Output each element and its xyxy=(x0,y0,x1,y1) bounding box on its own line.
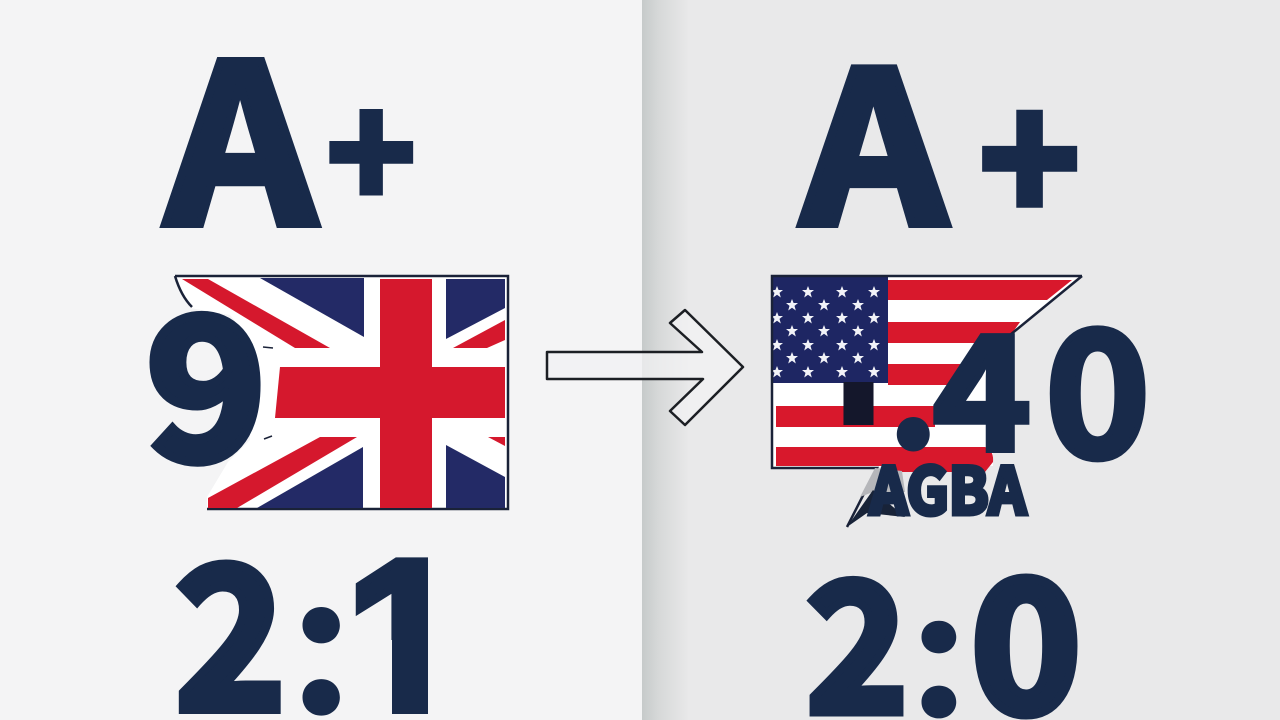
value: I block: I xyxy=(825,358,892,442)
US grade: A+: + xyxy=(980,26,1080,272)
value: dot: . xyxy=(884,240,943,501)
UK grade: A+: + xyxy=(327,36,416,252)
panel: UK background xyxy=(0,0,642,720)
US grade: A+ xyxy=(801,0,1080,285)
UK value: 9: 9 xyxy=(146,232,266,516)
value: 4: 4 xyxy=(933,267,1031,496)
badge text: AGBA: AGBA xyxy=(869,441,1027,533)
US ratio: 2:0 xyxy=(806,502,1081,720)
icon: US flag xyxy=(771,276,1082,527)
value: 0: 0 xyxy=(1045,254,1150,507)
arrow xyxy=(547,310,743,425)
panel: US background xyxy=(642,0,1280,720)
UK grade: A+ xyxy=(165,0,416,288)
icon: UK flag xyxy=(175,276,509,510)
UK ratio: 2:1 xyxy=(176,557,428,716)
